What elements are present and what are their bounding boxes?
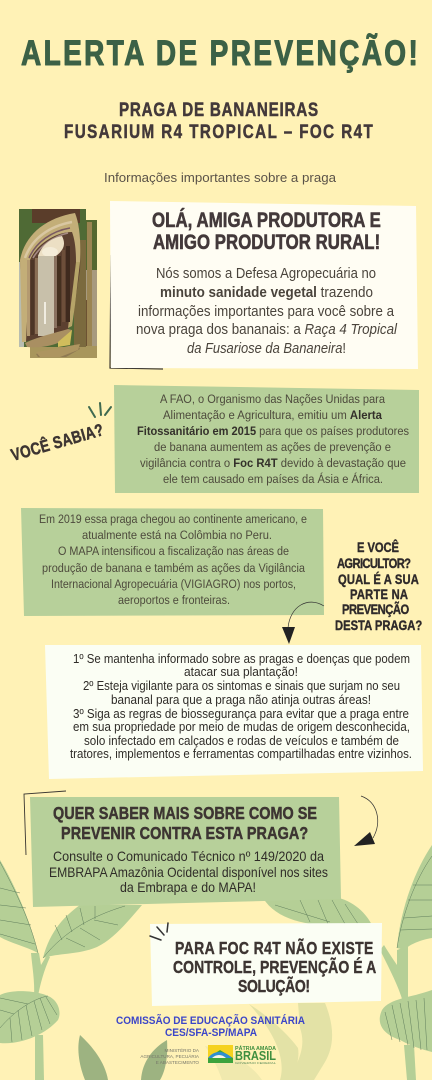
question: e você agricultor: AGRICULTOR? [337,556,411,571]
back foliage [30,220,97,358]
cut slices [25,329,72,347]
americas text: O MAPA intensificou a fiscalização nas áreas de [58,544,289,558]
greeting body: Nós somos a Defesa Agropecuária no [156,266,376,282]
FAO text [137,392,409,486]
subtitle: PRAGA DE BANANEIRAS [119,98,318,120]
panel: greeting [110,201,418,369]
ministry logo text [140,1047,200,1065]
growth rings [25,222,72,258]
americas text: Internacional Agropecuária (VIGIAGRO) nos portos, [51,577,296,591]
panel: prevention steps [45,645,423,779]
prevention text: solo infectado em calçados e rodas de veículos e também de [84,733,399,748]
subtitle [64,98,373,142]
greeting body: nova praga dos bananais: a Raça 4 Tropical [136,322,398,338]
logo wordmark: PÁTRIA AMADA [235,1045,276,1052]
FAO text: A FAO, o Organismo das Nações Unidas para [160,392,385,406]
panel: arrival in the Americas [21,508,324,616]
americas text: aeroportos e fronteiras. [118,593,230,607]
panel: FAO alert [114,385,419,493]
right plant [380,845,432,1080]
stripes [38,256,54,336]
greeting body: informações importantes para você sobre a [138,304,395,320]
americas text: atualmente está na Colômbia no Peru. [82,528,272,542]
greeting heading: OLÁ, AMIGA PRODUTORA E [152,208,381,233]
right plant veins [385,856,432,1050]
greeting heading [152,208,381,255]
FAO text: Alimentação e Agricultura, emitiu um Alerta [163,408,382,422]
prevention text: bananal para que a praga não atinja outras áreas! [111,692,371,707]
ministry logo text: MINISTÉRIO DA [165,1047,200,1053]
question: e você agricultor: PARTE NA [350,587,408,602]
muted dark leaves [78,1035,167,1080]
icon: emphasis ticks [150,923,168,940]
learn more body: Consulte o Comunicado Técnico nº 149/2020 da [53,848,324,864]
learn more body: EMBRAPA Amazônia Ocidental disponível nos sites [49,864,328,880]
pale background leaves [205,1003,332,1080]
logo: Pátria Amada Brasil: BRASIL [235,1048,276,1063]
stem body [20,213,80,342]
subtitle: FUSARIUM R4 TROPICAL – FOC R4T [64,120,373,142]
ministry logo text: E ABASTECIMENTO [156,1060,199,1065]
intro line: Informações importantes sobre a praga [104,170,337,185]
question: e você agricultor: E VOCÊ [357,539,399,555]
key message text: SOLUÇÃO! [238,974,310,996]
FAO text: de banana aumentem as ações de prevenção e [154,440,391,454]
learn more heading: QUER SABER MAIS SOBRE COMO SE [53,804,317,823]
prevention text: atacar sua plantação! [184,664,298,679]
key message text: CONTROLE, PREVENÇÃO É A [173,955,377,977]
left plant [0,860,142,1080]
icon: flag [208,1045,233,1063]
center leaf behind panel [263,896,372,926]
ministry logo text: AGRICULTURA, PECUÁRIA [140,1053,200,1059]
panel: learn more [24,791,341,907]
learn more body [49,848,328,895]
americas text [39,512,307,607]
title: ALERTA DE PREVENÇÃO! [21,33,418,73]
question: e você agricultor: QUAL É A SUA [338,571,419,587]
learn more body: da Embrapa e do MAPA! [120,879,256,895]
footer credit [116,1014,305,1039]
background foliage [0,845,432,1080]
americas text: produção de banana e também as ações da Vigilância [42,561,305,575]
key message text: PARA FOC R4T NÃO EXISTE [175,936,373,958]
FAO text: Fitossanitário em 2015 para que os países produtores [137,424,409,438]
key message text [173,936,377,996]
callout: você sabia [9,403,111,465]
left plant veins [0,862,125,1042]
greeting body: da Fusariose da Bananeira! [187,341,346,357]
FAO text: vigilância contra o Foc R4T devido à devastação que [140,456,406,470]
icon: emphasis ticks [89,403,111,417]
question: e você agricultor [335,539,422,633]
question: e você agricultor: DESTA PRAGA? [335,618,422,633]
americas text: Em 2019 essa praga chegou ao continente americano, e [39,512,307,526]
arrow: curved pointer [354,796,378,846]
footer credit: COMISSÃO DE EDUCAÇÃO SANITÁRIA [116,1014,305,1027]
greeting body: minuto sanidade vegetal trazendo [160,285,373,301]
logo: Pátria Amada Brasil: GOVERNO FEDERAL [235,1061,276,1065]
greeting body [136,266,398,357]
photo: cut banana pseudostem [19,209,97,358]
FAO text: ele tem causado em países da Ásia e África. [163,471,383,486]
outer rim [20,213,80,342]
greeting heading: AMIGO PRODUTOR RURAL! [153,231,380,255]
footer credit: CES/SFA-SP/MAPA [165,1027,257,1039]
logo: Pátria Amada Brasil [208,1045,276,1065]
arrow: to prevention steps [282,602,324,644]
você sabia label: VOCÊ SABIA? [9,420,106,465]
panel: key message [150,923,382,1006]
learn more heading: PREVENIR CONTRA ESTA PRAGA? [61,824,308,843]
question: e você agricultor: PREVENÇÃO [342,601,409,617]
prevention text [70,651,412,761]
learn more heading [53,804,317,843]
